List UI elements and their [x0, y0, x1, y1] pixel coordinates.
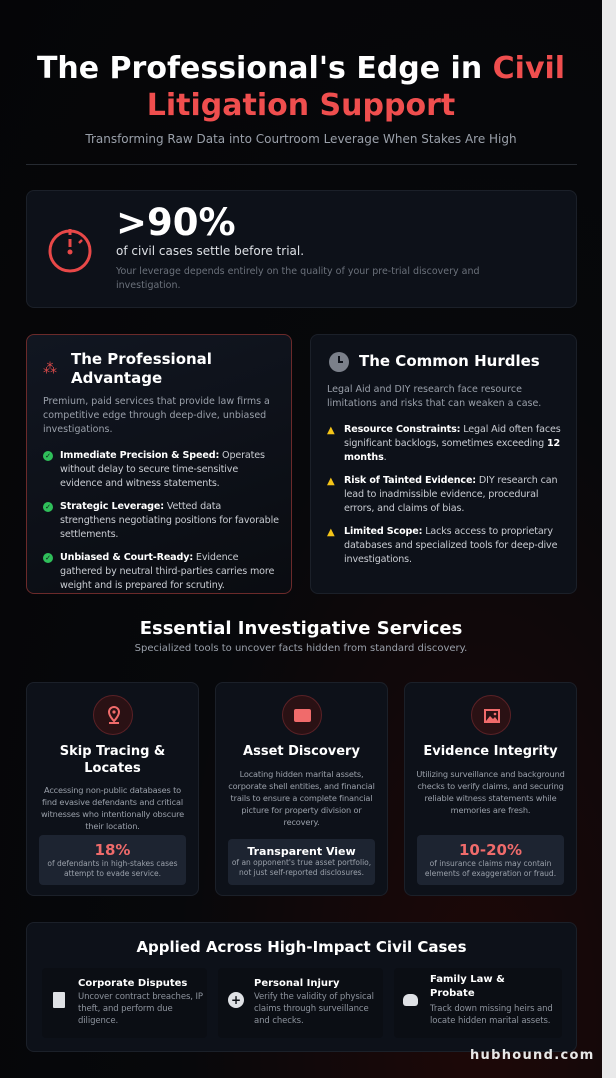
case: family law: [394, 968, 562, 1038]
panel: common hurdles: [310, 334, 577, 594]
heading: [71, 350, 212, 387]
card: skip tracing: Accessing non-public databases to find evasive defendants and critical witnesses who intentionally obscure their location.: [41, 785, 184, 831]
icon: plus: [228, 992, 244, 1008]
case: family law: Probate: [430, 988, 475, 999]
icon: location pin: [93, 695, 133, 735]
list: Unbiased & Court-Ready: Evidence gathered by neutral third-parties carries more weight and is prepared for scrutiny.: [60, 552, 274, 591]
stat: 18%: of defendants in high-stakes cases attempt to evade service.: [47, 859, 178, 878]
icon: image: [471, 695, 511, 735]
panel: professional advantage: [26, 334, 292, 594]
icon: sparkle: ⁂: [43, 361, 57, 377]
list: ✓: [45, 503, 51, 511]
list: ▲: [327, 476, 335, 487]
card: evidence integrity: Utilizing surveillance and background checks to verify claims, and securing reliable witness statements while memories are fresh.: [416, 769, 565, 815]
list: ▲: [327, 527, 335, 538]
case: corporate: Uncover contract breaches, IP theft, and perform due diligence.: [78, 992, 203, 1026]
card: skip tracing: Locates: [84, 761, 141, 776]
intro: Premium, paid services that provide law firms a competitive edge through deep-dive, unbiased investigations.: [43, 396, 270, 435]
heading: The Professional: [71, 350, 212, 368]
icon: gauge: [48, 229, 92, 272]
panel: key statistic: [26, 190, 577, 308]
heading: Applied Across High-Impact Civil Cases: [136, 938, 467, 956]
card: asset discovery: Asset Discovery: [243, 744, 360, 759]
stat: 10-20%: of insurance claims may contain elements of exaggeration or fraud.: [425, 859, 556, 878]
heading: The Common Hurdles: [359, 352, 540, 370]
card: skip tracing: [26, 682, 199, 896]
card: evidence integrity: [404, 682, 577, 896]
icon: wallet: [282, 695, 322, 735]
stat number: >90%: [116, 201, 236, 244]
case: personal injury: [218, 968, 383, 1038]
list: Risk of Tainted Evidence: DIY research can lead to inadmissible evidence, procedural errors, and claims of bias.: [344, 475, 557, 514]
stat text: of civil cases settle before trial.: [116, 244, 304, 258]
icon: plus: +: [231, 993, 241, 1007]
title: Litigation Support: [147, 88, 455, 123]
list: Strategic Leverage: Vetted data strengthens negotiating positions for favorable settlements.: [60, 501, 279, 540]
icon: clock: [329, 352, 349, 372]
case: personal injury: Personal Injury: [254, 978, 339, 989]
list: [43, 450, 279, 591]
section heading: Essential Investigative Services: [140, 618, 462, 639]
case: family law: Track down missing heirs and locate hidden marital assets.: [430, 1004, 553, 1026]
case: corporate: [42, 968, 207, 1038]
stat: transparent view: of an opponent's true asset portfolio, not just self-reported disclosures.: [232, 858, 371, 877]
intro: Legal Aid and DIY research face resource limitations and risks that can weaken a case.: [327, 384, 541, 409]
title: [37, 51, 565, 123]
stat: transparent view: Transparent View: [247, 845, 356, 858]
stat: 18%: [39, 835, 186, 885]
section subtitle: Specialized tools to uncover facts hidden from standard discovery.: [135, 643, 467, 654]
stat: transparent view: [228, 839, 375, 885]
case: family law: Family Law &: [430, 974, 505, 985]
card: asset discovery: Locating hidden marital assets, corporate shell entities, and financial trails to ensure a complete financial picture for property division or recovery.: [228, 769, 375, 827]
card: asset discovery: [215, 682, 388, 896]
list: ▲: [327, 425, 335, 436]
footer brand: hubhound.com: [470, 1048, 595, 1063]
stat: 10-20%: 10-20%: [459, 841, 522, 859]
case: personal injury: Verify the validity of physical claims through surveillance and checks.: [254, 992, 374, 1026]
title: The Professional's Edge in Civil: [37, 51, 565, 86]
case: corporate: Corporate Disputes: [78, 978, 187, 989]
card: evidence integrity: Evidence Integrity: [423, 744, 558, 759]
panel: applied cases: [26, 922, 577, 1052]
heading: Advantage: [71, 369, 162, 387]
list: ✓: [45, 554, 51, 562]
icon: document: [53, 992, 65, 1008]
list: Limited Scope: Lacks access to proprietary databases and specialized tools for deep-dive investigations.: [344, 526, 557, 565]
card: skip tracing: Skip Tracing &: [60, 744, 165, 759]
stat note: Your leverage depends entirely on the quality of your pre-trial discovery and investigation.: [116, 266, 480, 291]
list: Immediate Precision & Speed: Operates without delay to secure time-sensitive evidence and witness statements.: [60, 450, 265, 489]
icon: piggy bank: [403, 994, 418, 1006]
list: [327, 424, 561, 565]
stat: 10-20%: [417, 835, 564, 885]
list: Resource Constraints: Legal Aid often faces significant backlogs, sometimes exceeding 12 months.: [344, 424, 561, 463]
subtitle: Transforming Raw Data into Courtroom Leverage When Stakes Are High: [85, 132, 517, 146]
list: ✓: [45, 452, 51, 460]
stat: 18%: 18%: [95, 841, 130, 859]
